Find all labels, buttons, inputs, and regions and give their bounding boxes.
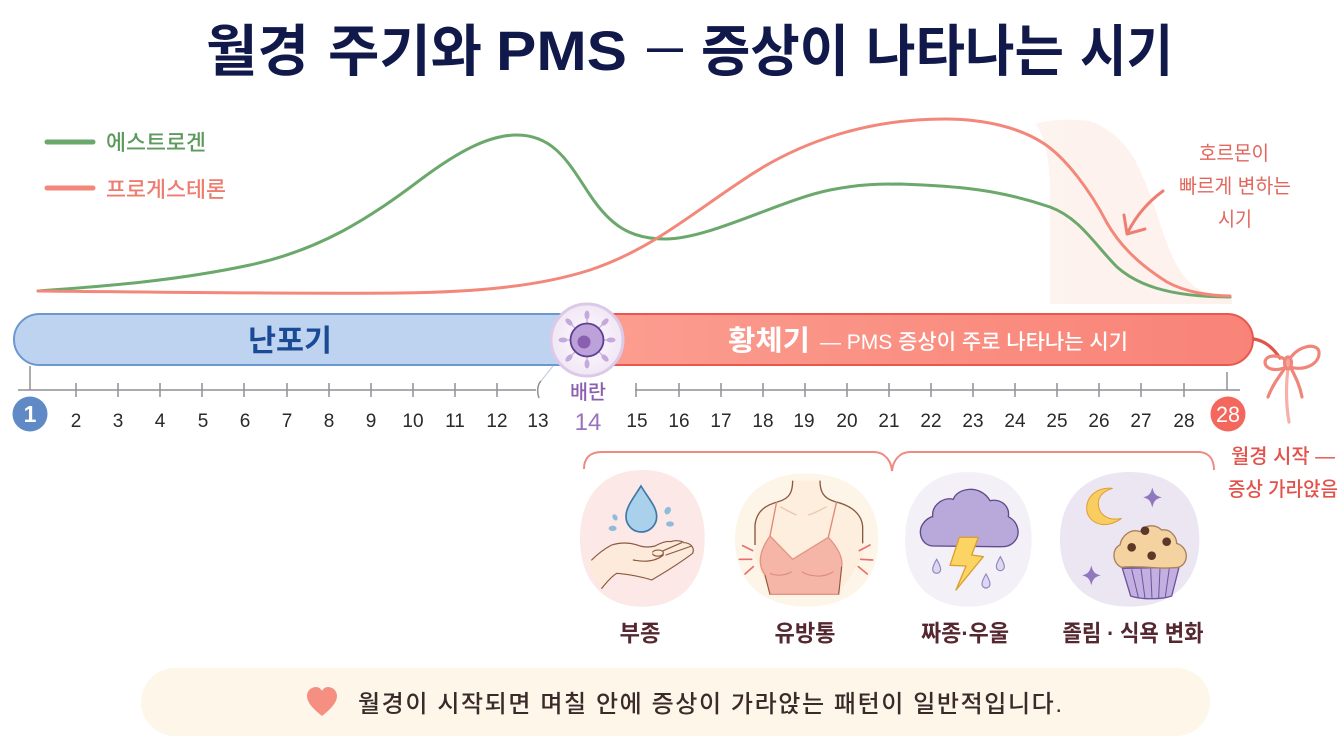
day numbers: 10 bbox=[402, 411, 424, 432]
callout: rapid hormone change: 호르몬이 bbox=[1199, 142, 1269, 165]
estrogen curve bbox=[38, 135, 1230, 297]
day numbers: 7 bbox=[282, 411, 292, 432]
icon: storm cloud bbox=[905, 472, 1032, 607]
day 28 marker bbox=[1210, 396, 1246, 432]
callout: rapid hormone change: 시기 bbox=[1218, 208, 1252, 231]
day numbers: 25 bbox=[1046, 411, 1068, 432]
icon: swelling bbox=[580, 470, 705, 607]
day numbers: 17 bbox=[710, 411, 732, 432]
day numbers: 20 bbox=[836, 411, 858, 432]
timeline axis bbox=[18, 366, 1240, 398]
title: PMS bbox=[496, 19, 627, 82]
symptom labels: 졸림 · 식욕 변화 bbox=[1062, 620, 1204, 646]
icon: moon and muffin bbox=[1060, 472, 1199, 607]
luteal phase bar: — PMS 증상이 주로 나타나는 시기 bbox=[820, 331, 1128, 354]
day numbers: 21 bbox=[878, 411, 900, 432]
icon: ovulation egg bbox=[551, 304, 623, 376]
symptom labels: 짜종·우울 bbox=[921, 620, 1009, 646]
day numbers: 3 bbox=[113, 411, 123, 432]
day numbers: 5 bbox=[198, 411, 208, 432]
day numbers: 9 bbox=[366, 411, 376, 432]
title bbox=[206, 19, 1173, 83]
symptom labels bbox=[620, 620, 1204, 646]
day numbers: 6 bbox=[240, 411, 250, 432]
day numbers: 15 bbox=[626, 411, 648, 432]
day numbers: 24 bbox=[1004, 411, 1026, 432]
legend: estrogen: 에스트로겐 bbox=[106, 131, 206, 155]
day 1 marker: 1 bbox=[24, 401, 37, 427]
icon: heart bbox=[307, 687, 337, 716]
period start note: 증상 가라앉음 bbox=[1228, 478, 1338, 501]
hormone chart bbox=[38, 119, 1230, 297]
ovulation label bbox=[570, 381, 606, 436]
title: — bbox=[647, 27, 683, 68]
day numbers: 22 bbox=[920, 411, 942, 432]
period start note bbox=[1228, 445, 1338, 501]
ribbon bow bbox=[1254, 339, 1319, 422]
progesterone curve bbox=[38, 119, 1230, 296]
period start note: 월경 시작 — bbox=[1231, 445, 1335, 468]
title: 월경 bbox=[206, 20, 309, 83]
day numbers: 4 bbox=[155, 411, 166, 432]
day numbers: 8 bbox=[324, 411, 334, 432]
highlighted rapid-change zone bbox=[1035, 120, 1232, 304]
follicular phase bar bbox=[14, 314, 584, 365]
symptom labels: 부종 bbox=[620, 620, 660, 646]
day numbers: 23 bbox=[962, 411, 984, 432]
symptom labels: 유방통 bbox=[774, 620, 836, 646]
day numbers: 12 bbox=[486, 411, 508, 432]
day numbers: 27 bbox=[1130, 411, 1152, 432]
callout: rapid hormone change bbox=[1124, 142, 1291, 234]
day numbers: 11 bbox=[445, 411, 465, 432]
day numbers: 19 bbox=[793, 411, 815, 432]
day numbers: 2 bbox=[71, 411, 81, 432]
ovulation label: 배란 bbox=[570, 381, 606, 404]
ovulation label: 14 bbox=[575, 409, 601, 436]
icon: breast pain bbox=[735, 473, 878, 607]
title: 시기 bbox=[1080, 20, 1173, 83]
day numbers bbox=[12, 381, 1246, 436]
day numbers: 28 bbox=[1173, 411, 1195, 432]
legend bbox=[47, 131, 226, 202]
arrow bbox=[1124, 191, 1163, 234]
title: 주기와 bbox=[328, 20, 482, 83]
day 1 marker bbox=[12, 396, 48, 432]
day numbers: 26 bbox=[1088, 411, 1110, 432]
legend: progesterone: 프로게스테론 bbox=[106, 178, 226, 202]
footer text: 월경이 시작되면 며칠 안에 증상이 가라앉는 패턴이 일반적입니다. bbox=[358, 691, 1062, 718]
follicular phase bar: 난포기 bbox=[248, 325, 332, 358]
day numbers: 13 bbox=[527, 411, 549, 432]
title: 증상이 bbox=[701, 20, 849, 83]
day numbers: 18 bbox=[752, 411, 774, 432]
day 28 marker: 28 bbox=[1216, 402, 1240, 427]
luteal phase bar: 황체기 bbox=[728, 325, 810, 356]
title: 나타나는 bbox=[866, 20, 1064, 83]
callout: rapid hormone change: 빠르게 변하는 bbox=[1179, 175, 1291, 198]
day numbers: 16 bbox=[668, 411, 690, 432]
symptom bracket bbox=[584, 452, 1214, 471]
footer banner bbox=[141, 668, 1210, 736]
luteal phase bar bbox=[560, 314, 1253, 365]
